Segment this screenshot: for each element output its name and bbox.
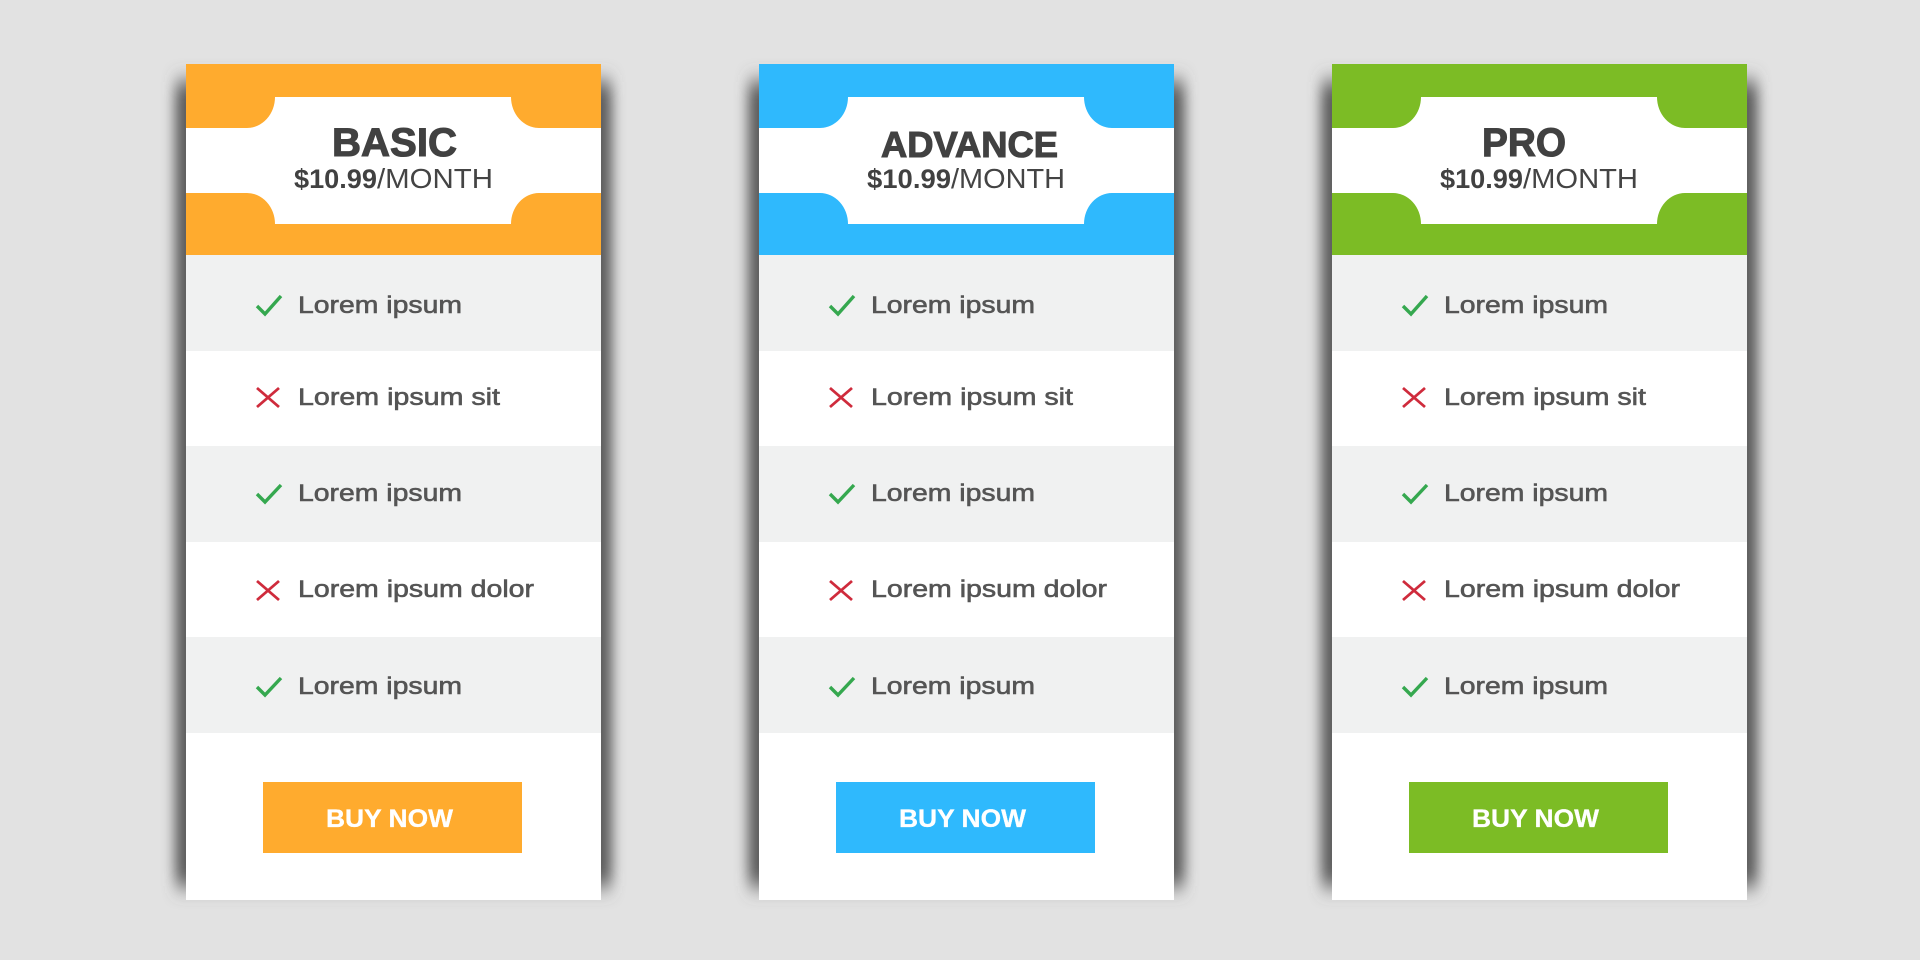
price: $10.99 [867, 164, 951, 194]
card shadow [175, 82, 612, 886]
price: $10.99 [294, 164, 377, 194]
buy now button [1409, 782, 1668, 853]
buy now button: BUY NOW [326, 805, 453, 833]
feature row 3 [1332, 446, 1747, 542]
price: $10.99 [1440, 164, 1523, 194]
panel: pro plan [1321, 64, 1758, 900]
feature row 2: Lorem ipsum sit [298, 384, 500, 411]
card shadow [1321, 82, 1758, 886]
heading: pro: PRO [1482, 121, 1566, 165]
feature row 1 [1332, 255, 1747, 351]
feature row 3 [186, 446, 601, 542]
header band bottom [759, 193, 1174, 255]
feature row 5 [759, 637, 1174, 733]
feature row 2: Lorem ipsum sit [1444, 384, 1646, 411]
price [294, 163, 493, 194]
price [1440, 163, 1638, 194]
card shadow [748, 82, 1185, 886]
feature row 4: Lorem ipsum dolor [871, 576, 1107, 603]
card body [759, 64, 1174, 900]
buy now button [836, 782, 1095, 853]
header band top [1332, 64, 1747, 128]
header band bottom [186, 193, 601, 255]
header band bottom [1332, 193, 1747, 255]
feature row 3: Lorem ipsum [871, 480, 1035, 507]
feature row 2 [257, 384, 500, 411]
feature row 2 [830, 384, 1073, 411]
feature row 4: Lorem ipsum dolor [1444, 576, 1680, 603]
header band top [186, 64, 601, 128]
feature row 1: Lorem ipsum [298, 292, 462, 319]
feature row 3: Lorem ipsum [298, 480, 462, 507]
panel: advance plan [748, 64, 1185, 900]
feature row 5: Lorem ipsum [298, 673, 462, 700]
feature row 2: Lorem ipsum sit [871, 384, 1073, 411]
price: /MONTH [1523, 163, 1638, 194]
panel: basic plan [175, 64, 612, 900]
feature row 1 [759, 255, 1174, 351]
feature row 3 [759, 446, 1174, 542]
card body [186, 64, 601, 900]
feature row 1: Lorem ipsum [1444, 292, 1608, 319]
price [867, 163, 1065, 194]
feature row 2 [1403, 384, 1646, 411]
heading: advance: ADVANCE [881, 124, 1058, 165]
buy now button: BUY NOW [1472, 805, 1599, 833]
feature row 5: Lorem ipsum [871, 673, 1035, 700]
card body [1332, 64, 1747, 900]
feature row 1: Lorem ipsum [871, 292, 1035, 319]
price: /MONTH [377, 163, 493, 194]
heading: basic: BASIC [332, 121, 457, 165]
price: /MONTH [951, 163, 1065, 194]
feature row 5 [1332, 637, 1747, 733]
buy now button [263, 782, 522, 853]
header band top [759, 64, 1174, 128]
buy now button: BUY NOW [899, 805, 1026, 833]
feature row 5: Lorem ipsum [1444, 673, 1608, 700]
feature row 4: Lorem ipsum dolor [298, 576, 534, 603]
feature row 1 [186, 255, 601, 351]
feature row 3: Lorem ipsum [1444, 480, 1608, 507]
feature row 5 [186, 637, 601, 733]
